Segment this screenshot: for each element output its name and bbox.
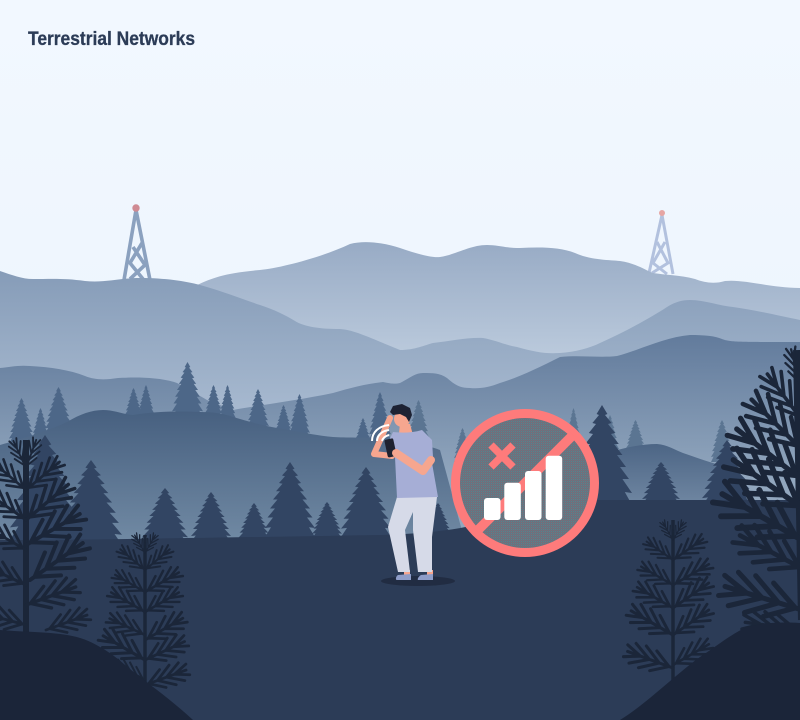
- no-signal icon: [451, 409, 599, 557]
- hair: [390, 404, 412, 422]
- front row of fir trees: [10, 405, 752, 545]
- title: Terrestrial Networks: [28, 29, 195, 50]
- dark hill: right: [610, 444, 720, 510]
- pine tree: small right: [622, 519, 716, 690]
- cross mark: [491, 445, 513, 467]
- back mountain range: [197, 242, 800, 420]
- dark hill: left: [0, 410, 470, 560]
- foreground hill: right: [620, 622, 800, 720]
- ground shadow: [381, 576, 455, 586]
- sign background: [455, 413, 595, 553]
- foreground hill: left: [0, 630, 193, 720]
- forearm and hand: [396, 453, 431, 471]
- shirt: [387, 430, 438, 498]
- back row of fir trees: [9, 362, 391, 450]
- near mountain range: [0, 335, 800, 540]
- wifi arcs: [372, 425, 389, 441]
- ground: [0, 500, 800, 720]
- ankles: [404, 570, 433, 576]
- person: [372, 404, 455, 586]
- phone: [384, 438, 397, 458]
- slash: [477, 435, 573, 531]
- mid mountain range: [0, 271, 800, 460]
- pine tree: large left: [0, 436, 94, 640]
- head: [394, 411, 410, 427]
- prohibition ring: [451, 409, 599, 557]
- signal bars: [484, 456, 562, 520]
- raised arm: [374, 418, 392, 456]
- back row of fir trees: right: [408, 400, 733, 462]
- trousers: [388, 497, 437, 572]
- neck: [399, 424, 413, 436]
- pine tree: large right: [708, 346, 800, 643]
- tower: right: [649, 210, 673, 274]
- tower: left: [124, 204, 150, 280]
- shoes: [396, 574, 433, 580]
- pine tree: small left: [96, 532, 191, 695]
